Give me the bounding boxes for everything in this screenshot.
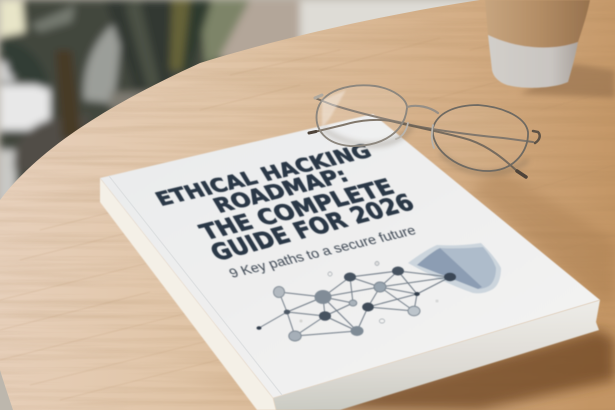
right lens xyxy=(433,105,528,171)
network links xyxy=(259,271,450,336)
book spine side xyxy=(100,178,276,410)
shield illustration xyxy=(408,243,501,293)
eyeglasses xyxy=(309,85,540,177)
book subtitle: 9 Key paths to a secure future xyxy=(226,223,418,281)
book xyxy=(100,114,600,410)
book page edges, front side xyxy=(273,300,600,410)
book title: GUIDE FOR 2026 xyxy=(206,190,419,266)
glasses temple arms xyxy=(309,98,540,177)
book front cover xyxy=(100,114,600,398)
book title: THE COMPLETE xyxy=(196,175,399,245)
nose pads xyxy=(396,123,434,148)
network nodes xyxy=(256,262,456,341)
left hinge xyxy=(315,95,322,98)
book title: ROADMAP: xyxy=(209,163,353,218)
glasses bridge xyxy=(407,106,438,113)
network diagram xyxy=(256,262,456,341)
coffee cup xyxy=(485,0,590,88)
book title: ETHICAL HACKING xyxy=(151,140,376,211)
book title xyxy=(151,140,419,266)
left lens xyxy=(317,85,407,146)
lens glare xyxy=(322,90,346,128)
glasses shadow xyxy=(322,126,528,173)
